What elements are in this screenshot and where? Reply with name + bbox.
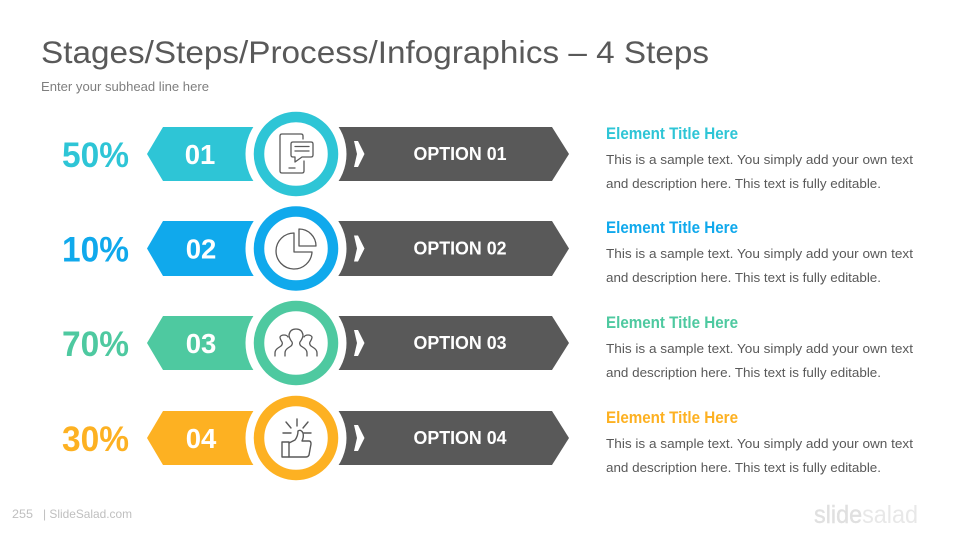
- element title 3: Element Title Here: [606, 314, 738, 332]
- description 1: This is a sample text. You simply add your own text: [606, 152, 913, 167]
- percentage 4: 30%: [62, 420, 129, 459]
- description 1: [606, 152, 913, 191]
- description 4: and description here. This text is fully editable.: [606, 460, 881, 475]
- number 2: 02: [186, 234, 216, 264]
- number 3: 03: [186, 328, 216, 359]
- percentage 3: 70%: [62, 325, 129, 364]
- number 1: 01: [185, 139, 215, 170]
- subhead: Enter your subhead line here: [41, 79, 209, 94]
- description 2: and description here. This text is fully editable.: [606, 270, 881, 285]
- white gap 2: [246, 198, 346, 299]
- title: Stages/Steps/Process/Infographics – 4 Steps: [41, 34, 709, 70]
- description 4: [606, 436, 913, 475]
- chevron 3: [354, 330, 364, 356]
- description 3: [606, 341, 913, 380]
- chevron 2: [354, 236, 364, 262]
- number 4: 04: [186, 423, 217, 454]
- step 2: [62, 198, 913, 299]
- ring 4: [259, 401, 333, 475]
- description 1: and description here. This text is fully editable.: [606, 176, 881, 191]
- description 2: [606, 246, 913, 285]
- option bar 4: [330, 411, 569, 465]
- description 2: This is a sample text. You simply add your own text: [606, 246, 913, 261]
- icon: people group: [275, 329, 317, 356]
- option label 2: OPTION 02: [414, 238, 506, 258]
- white gap 1: [246, 104, 346, 204]
- footer page number: 255: [12, 507, 33, 521]
- footer page number: | SlideSalad.com: [43, 507, 132, 521]
- left arrow 3: [147, 316, 262, 370]
- step 4: [62, 388, 913, 488]
- step 3: [62, 292, 913, 394]
- percentage 1: 50%: [62, 136, 129, 175]
- step 1: [62, 104, 913, 204]
- description 3: This is a sample text. You simply add your own text: [606, 341, 913, 356]
- ring 3: [259, 306, 333, 380]
- chevron 4: [354, 425, 364, 451]
- left arrow 2: [147, 221, 262, 276]
- option bar 2: [330, 221, 569, 276]
- footer logo: slidesalad: [814, 501, 918, 529]
- option label 4: OPTION 04: [414, 428, 506, 448]
- left arrow 1: [147, 127, 262, 181]
- description 3: and description here. This text is fully editable.: [606, 365, 881, 380]
- icon: thumbs up: [282, 419, 311, 457]
- ring 2: [259, 212, 333, 286]
- option bar 3: [330, 316, 569, 370]
- element title 4: Element Title Here: [606, 409, 738, 427]
- description 4: This is a sample text. You simply add your own text: [606, 436, 913, 451]
- percentage 2: 10%: [62, 230, 129, 270]
- left arrow 4: [147, 411, 262, 465]
- icon: phone message: [280, 134, 313, 173]
- element title 2: Element Title Here: [606, 219, 738, 237]
- icon: pie chart: [276, 229, 316, 269]
- ring 1: [259, 117, 333, 191]
- option label 1: OPTION 01: [414, 144, 506, 164]
- element title 1: Element Title Here: [606, 125, 738, 143]
- option label 3: OPTION 03: [414, 333, 506, 353]
- chevron 1: [354, 141, 364, 167]
- option bar 1: [330, 127, 569, 181]
- white gap 4: [246, 388, 346, 488]
- white gap 3: [246, 292, 346, 394]
